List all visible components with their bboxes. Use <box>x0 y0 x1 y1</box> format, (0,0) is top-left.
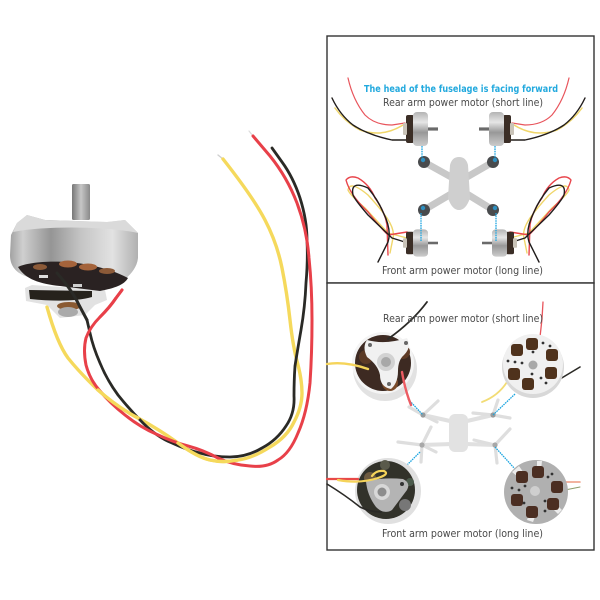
black wire top run <box>57 273 87 320</box>
front-left motor wires <box>346 177 408 262</box>
black wire lower run <box>87 148 307 457</box>
motor shaft <box>72 184 90 220</box>
label: rear arm motor bottom panel: Rear arm power motor (short line) <box>383 314 543 325</box>
front-left motor wires <box>327 471 386 512</box>
label: front arm motor top panel: Front arm power motor (long line) <box>382 266 543 277</box>
yellow wire <box>47 155 302 462</box>
front-right motor wires <box>565 482 580 490</box>
rear-right motor wires <box>482 302 580 402</box>
label: front arm motor bottom panel: Front arm power motor (long line) <box>382 529 543 540</box>
stator with coils <box>18 260 128 291</box>
rear-right motor wires <box>510 78 585 140</box>
yellow wire overlap <box>98 390 238 462</box>
motor top face <box>13 215 138 233</box>
front-left motor underside <box>355 458 421 524</box>
mounting plate <box>25 285 107 318</box>
heading: fuselage direction: The head of the fuselage is facing forward <box>364 84 558 95</box>
red wire <box>84 131 312 466</box>
bottom panel illustration <box>327 302 580 524</box>
front-right motor wires <box>509 177 571 262</box>
top panel illustration <box>332 78 585 262</box>
red wire exit <box>100 290 122 317</box>
blue dotted leaders <box>405 394 515 469</box>
side-view motors <box>403 112 517 257</box>
panel: bottom wiring diagram frame <box>327 283 594 550</box>
drone top view <box>418 156 499 216</box>
rear-left motor wires <box>332 78 407 140</box>
motor body <box>10 215 138 288</box>
rear-left motor underside <box>352 332 417 401</box>
blue dotted leader lines <box>421 146 496 241</box>
label: rear arm motor top panel: Rear arm power motor (short line) <box>383 98 543 109</box>
rear-right motor underside <box>502 334 564 398</box>
panel: top wiring diagram frame <box>327 36 594 283</box>
front-right motor underside <box>504 460 568 524</box>
rear-left motor wires <box>327 302 427 405</box>
drone front view <box>398 400 510 463</box>
main motor photo with wires <box>10 131 312 466</box>
